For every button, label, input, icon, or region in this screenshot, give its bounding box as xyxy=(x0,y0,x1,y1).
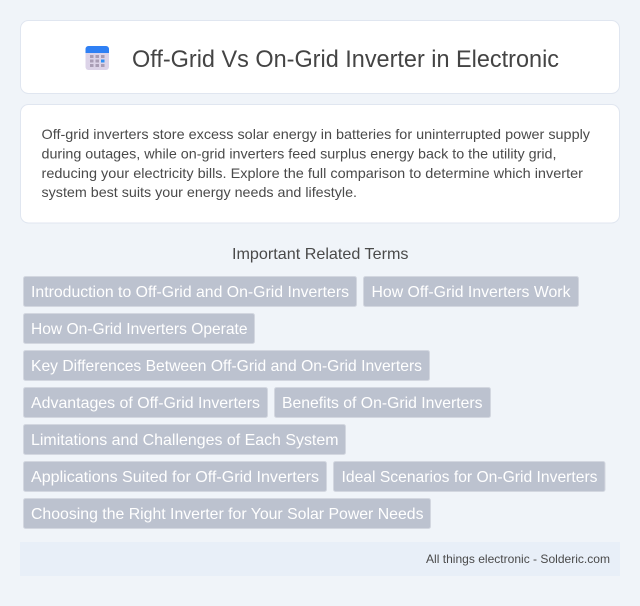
tag: introduction xyxy=(24,276,356,306)
tag: how off-grid works xyxy=(364,276,578,306)
tag: how off-grid works: How Off-Grid Inverters Work xyxy=(372,284,571,301)
tag: choosing xyxy=(24,498,430,528)
tag: choosing: Choosing the Right Inverter for Your Solar Power Needs xyxy=(31,506,424,523)
tag: how on-grid operates xyxy=(24,314,254,344)
tag list xyxy=(24,276,605,528)
icon: calendar xyxy=(86,46,109,70)
tag: advantages xyxy=(24,388,268,418)
tag: introduction: Introduction to Off-Grid and On-Grid Inverters xyxy=(31,284,349,301)
text block: description: during outages, while on-grid inverters feed surplus energy back to the utility grid, xyxy=(42,146,556,162)
tag: advantages: Advantages of Off-Grid Inverters xyxy=(31,395,260,412)
footer text: All things electronic - Solderic.com xyxy=(426,552,610,566)
text block: description: system best suits your energy needs and lifestyle. xyxy=(42,184,357,200)
heading: related terms: Important Related Terms xyxy=(232,246,408,263)
footer xyxy=(20,542,620,576)
tag: limitations: Limitations and Challenges of Each System xyxy=(31,432,338,449)
title: Off-Grid Vs On-Grid Inverter in Electronic xyxy=(132,46,559,73)
text block: description: Off-grid inverters store excess solar energy in batteries for uninterrupted power supply xyxy=(42,126,590,142)
tag: ideal scenarios: Ideal Scenarios for On-Grid Inverters xyxy=(342,469,598,486)
text block: description xyxy=(42,126,590,200)
tag: limitations xyxy=(24,424,346,454)
tag: how on-grid operates: How On-Grid Inverters Operate xyxy=(31,321,248,338)
text block: description: reducing your electricity bills. Explore the full comparison to determine which inverter xyxy=(42,165,583,181)
tag: applications: Applications Suited for Off-Grid Inverters xyxy=(31,469,319,486)
tag: key differences: Key Differences Between Off-Grid and On-Grid Inverters xyxy=(31,358,422,375)
tag: applications xyxy=(24,462,326,492)
tag: benefits: Benefits of On-Grid Inverters xyxy=(282,395,482,412)
panel: description xyxy=(20,104,620,223)
tag: ideal scenarios xyxy=(334,462,605,492)
tag: benefits xyxy=(274,388,490,418)
panel: title card xyxy=(20,20,620,94)
tag: key differences xyxy=(24,350,430,380)
